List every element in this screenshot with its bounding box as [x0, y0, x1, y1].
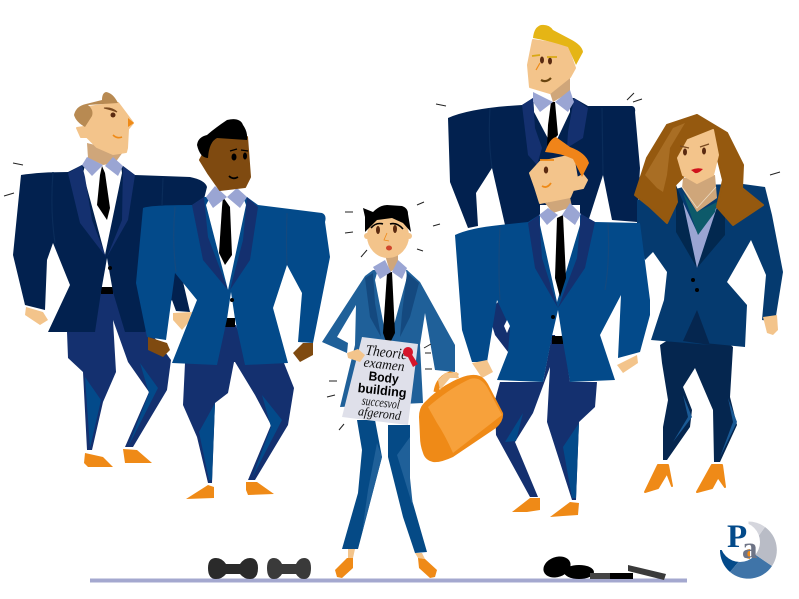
- figure: man with orange hair: [455, 137, 650, 517]
- ground line: [90, 578, 687, 582]
- certificate with text: succesvol: [361, 393, 401, 412]
- figure: small man with certificate: [322, 205, 503, 578]
- logo: Pa: a: [742, 530, 758, 565]
- certificate with text: building: [357, 380, 407, 401]
- briefcase: [419, 374, 503, 462]
- certificate with text: [342, 337, 418, 425]
- figure: blond man (back): [448, 25, 640, 228]
- logo: Pa: [720, 519, 777, 579]
- certificate with text: afgerond: [357, 403, 402, 423]
- dumbbell left: [208, 558, 258, 579]
- logo: Pa: P: [727, 519, 747, 555]
- figure: dark-skinned man: [136, 119, 330, 499]
- figure: man with tan hair: [13, 92, 207, 467]
- certificate with text: Theorie: [365, 343, 409, 363]
- dumbbell middle: [267, 558, 311, 579]
- collapsed dumbbell: [540, 553, 666, 581]
- certificate with text: Body: [368, 368, 400, 387]
- motion ticks: [4, 93, 780, 430]
- figure: woman with brown hair: [635, 115, 783, 492]
- certificate with text: examen: [363, 356, 405, 375]
